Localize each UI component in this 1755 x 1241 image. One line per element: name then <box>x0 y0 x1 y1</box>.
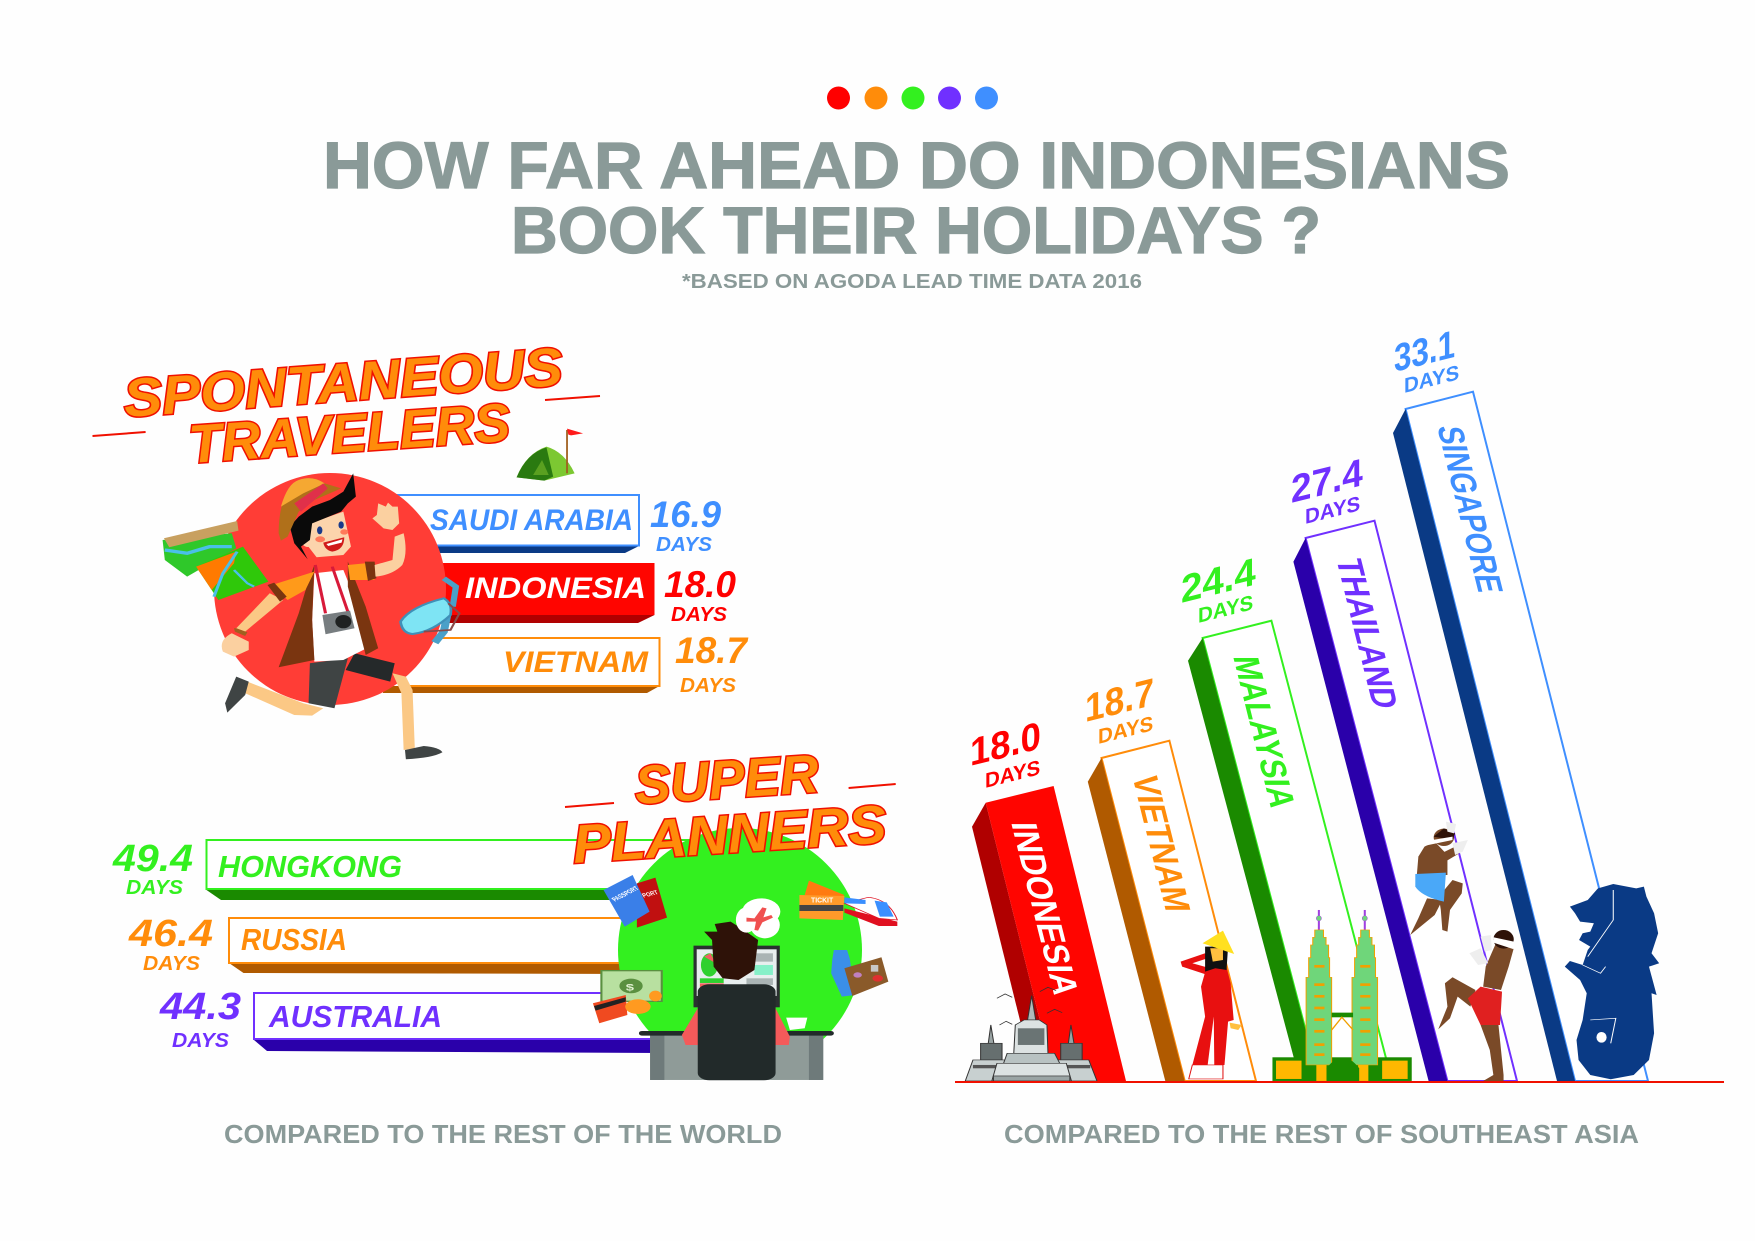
column: Malaysia: 24.4 <box>1181 550 1256 612</box>
icon: merlion <box>1565 884 1659 1079</box>
bar: Australia <box>159 986 674 1053</box>
column: Vietnam: VIETNAM <box>1124 775 1199 912</box>
column: Indonesia: 18.0 <box>970 714 1041 775</box>
icon: passports <box>604 875 667 928</box>
icon: tickets and train: TICKIT <box>811 897 834 904</box>
icon: muay thai fighters <box>1410 822 1514 1082</box>
icon: Vietnamese woman <box>1181 931 1242 1079</box>
bar: Saudi Arabia: DAYS <box>656 534 713 556</box>
green circle <box>618 828 862 1072</box>
column: Malaysia: MALAYSIA <box>1225 656 1304 808</box>
icon: money and card <box>593 971 662 1023</box>
column: Thailand: THAILAND <box>1328 558 1407 708</box>
bar: Indonesia: DAYS <box>671 604 728 626</box>
bar: Australia: 44.3 <box>159 986 241 1028</box>
caption: southeast asia: COMPARED TO THE REST OF SOUTHEAST ASIA <box>1004 1119 1639 1149</box>
bar: Russia <box>128 913 649 975</box>
bar: Vietnam: 18.7 <box>675 630 749 671</box>
icon: Petronas towers <box>1272 910 1412 1081</box>
panel: spontaneous travelers <box>92 337 749 759</box>
column: Vietnam: 18.7 <box>1085 671 1154 731</box>
icon: passports: PASSPORT <box>610 885 641 903</box>
bar: Vietnam: VIETNAM <box>503 646 649 679</box>
column: Indonesia <box>970 714 1126 1081</box>
panel: super planners <box>112 744 897 1080</box>
column: Thailand: DAYS <box>1305 492 1360 529</box>
bar: Russia: 46.4 <box>128 913 213 955</box>
colored dots <box>827 86 998 110</box>
column: Indonesia: DAYS <box>985 756 1040 793</box>
bar: Hongkong: 49.4 <box>112 838 193 880</box>
heading: spontaneous travelers: TRAVELERS <box>187 393 512 475</box>
icon: tent <box>517 429 583 481</box>
icon: person at desk <box>639 922 834 1080</box>
heading: super planners: SUPER <box>633 744 820 816</box>
column: Vietnam <box>1085 671 1256 1081</box>
icon: thought cloud with plane <box>736 898 780 938</box>
icon: money and card: $ <box>626 982 634 993</box>
bar: Hongkong: HONGKONG <box>218 849 402 884</box>
bar: Vietnam: DAYS <box>680 675 737 697</box>
bar: Russia: RUSSIA <box>241 922 347 957</box>
icon: map <box>163 521 268 600</box>
icon: running traveler <box>222 473 442 759</box>
title: HOW FAR AHEAD DO INDONESIANS <box>323 128 1510 202</box>
ground line <box>955 1081 1724 1083</box>
bar: Hongkong: DAYS <box>126 877 184 899</box>
bar: Saudi Arabia <box>390 494 721 556</box>
bar: Indonesia <box>400 563 736 626</box>
bar: Vietnam <box>383 630 749 697</box>
icon: Borobudur temple <box>965 987 1097 1081</box>
icon: diving goggles <box>401 578 459 643</box>
bar: Hongkong <box>112 838 697 900</box>
icon: passports: PORT <box>641 890 660 899</box>
title: BOOK THEIR HOLIDAYS ? <box>511 193 1321 267</box>
column: Thailand <box>1291 451 1517 1081</box>
column: Singapore: 33.1 <box>1394 323 1455 381</box>
bar: Australia: AUSTRALIA <box>268 999 442 1034</box>
caption: world: COMPARED TO THE REST OF THE WORLD <box>224 1119 782 1149</box>
column: Vietnam: DAYS <box>1098 712 1153 749</box>
column: Singapore: SINGAPORE <box>1429 426 1512 593</box>
bar: Australia: DAYS <box>172 1030 230 1052</box>
bar: Saudi Arabia: 16.9 <box>650 494 721 535</box>
icon: luggage <box>831 950 888 997</box>
subtitle: *BASED ON AGODA LEAD TIME DATA 2016 <box>682 271 1142 293</box>
bar: Russia: DAYS <box>143 953 201 975</box>
icon: tickets and train <box>799 881 897 926</box>
column: Indonesia: INDONESIA <box>1003 822 1087 996</box>
panel: southeast asia chart <box>955 323 1724 1083</box>
column: Singapore <box>1393 323 1648 1081</box>
column: Malaysia <box>1181 550 1392 1081</box>
bar: Saudi Arabia: SAUDI ARABIA <box>430 504 633 537</box>
heading: super planners <box>565 744 896 875</box>
red circle <box>214 473 446 705</box>
heading: spontaneous travelers: SPONTANEOUS <box>121 337 565 429</box>
heading: super planners: PLANNERS <box>571 794 888 875</box>
bar: Indonesia: INDONESIA <box>465 572 646 605</box>
heading: spontaneous travelers <box>92 337 600 475</box>
column: Singapore: DAYS <box>1404 361 1459 398</box>
bar: Indonesia: 18.0 <box>664 564 736 605</box>
column: Thailand: 27.4 <box>1291 451 1363 512</box>
title <box>323 128 1510 267</box>
column: Malaysia: DAYS <box>1198 591 1253 628</box>
